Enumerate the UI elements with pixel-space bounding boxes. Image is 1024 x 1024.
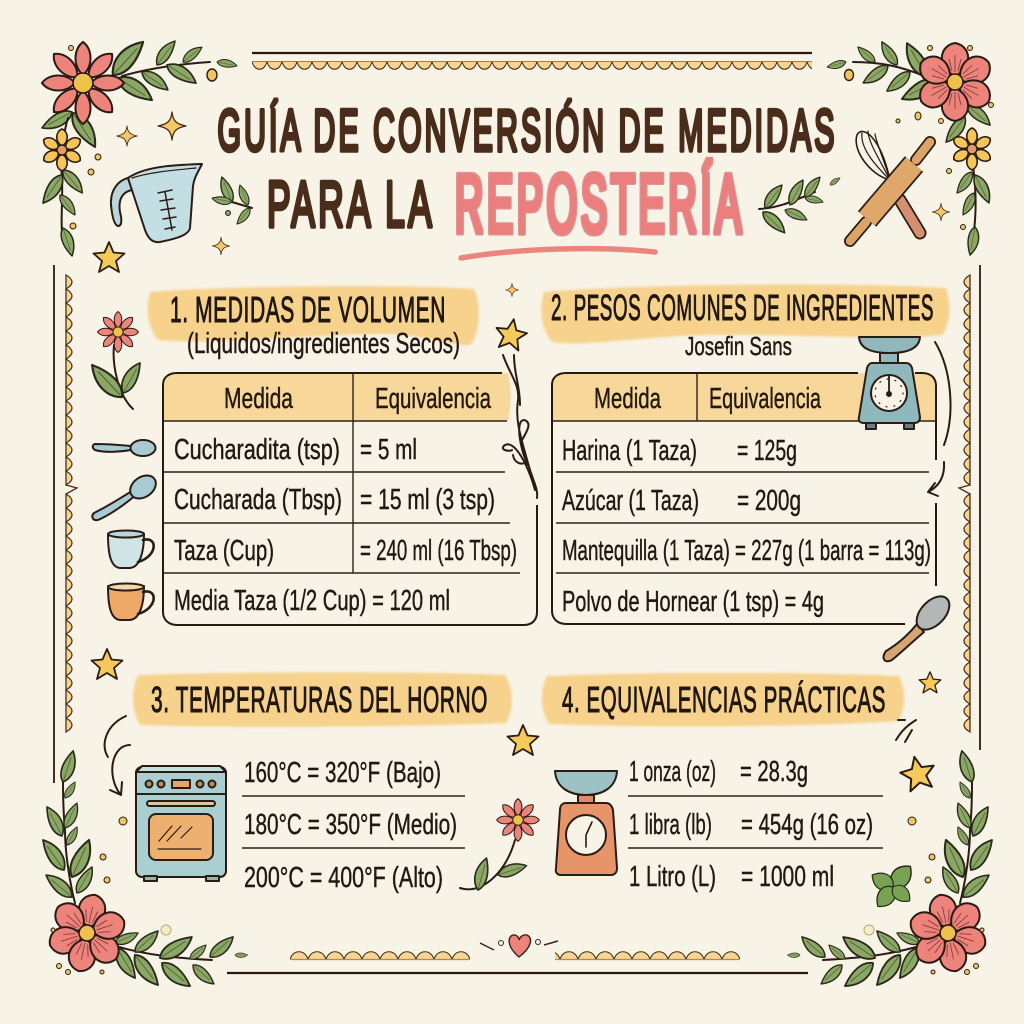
icon: heart ornament: [480, 935, 558, 957]
icon: mint leaves: [868, 860, 917, 912]
icon: oven: [136, 766, 226, 881]
table 1: = 5 ml: [360, 434, 417, 466]
left ornament border: [54, 265, 77, 783]
arrows to oven: [105, 716, 130, 795]
equivalences list: 1 libra (lb): [629, 809, 712, 841]
title underline: [461, 249, 655, 258]
table 2: Polvo de Hornear (1 tsp) = 4g: [562, 586, 824, 618]
table 1: Cucharadita (tsp): [174, 434, 340, 466]
corner floral: top right: [826, 39, 995, 256]
heading: section 3: 3. TEMPERATURAS DEL HORNO: [151, 679, 488, 720]
equivalences list: 1 Litro (L): [629, 861, 716, 893]
icon: orange cup: [108, 584, 154, 620]
icon: left twig: [211, 175, 253, 227]
heading: section 1: (Liquidos/ingredientes Secos): [187, 328, 460, 360]
heading: section 3: [133, 672, 512, 727]
icon: sparkles and stars top left: [94, 112, 230, 272]
icon: orange kitchen scale: [555, 771, 617, 875]
table 1: = 15 ml (3 tsp): [360, 484, 495, 516]
heading: section 4: [542, 673, 904, 726]
table 2: [552, 373, 936, 624]
table 1: [163, 373, 537, 625]
icon: right twig: [759, 174, 841, 236]
icon: teaspoon: [93, 440, 156, 456]
table 1: = 240 ml (16 Tbsp): [360, 535, 517, 567]
title: [218, 98, 838, 250]
icon: whisk and rolling pin: [850, 131, 930, 241]
table 1: Medida: [224, 383, 294, 415]
icon: flower with stem: [460, 799, 539, 891]
title: PARA LA: [267, 168, 435, 240]
table 2: Harina (1 Taza): [562, 435, 697, 467]
equivalences list: = 454g (16 oz): [741, 809, 873, 841]
icon: sparkle right: [932, 203, 950, 221]
icon: blue cup: [108, 530, 154, 568]
top ornament border: [252, 53, 812, 70]
panel: pesos: [542, 285, 949, 624]
corner floral: top left: [38, 36, 238, 257]
table 1: Taza (Cup): [174, 535, 274, 567]
equivalences list: = 1000 ml: [741, 861, 834, 893]
icon: blue kitchen scale: [859, 337, 920, 429]
equivalences list: 1 onza (oz): [629, 756, 716, 788]
table 2: Equivalencia: [709, 383, 822, 415]
heading: section 2: Josefin Sans: [685, 331, 792, 361]
icon: spoon: [884, 590, 956, 661]
table 2: Azúcar (1 Taza): [562, 485, 699, 517]
icon: small flower: [86, 312, 145, 409]
panel: volumen: [148, 286, 537, 625]
oven temperature list: 200°C = 400°F (Alto): [244, 862, 443, 894]
heading: section 1: [148, 286, 479, 360]
bottom ornament border: [227, 950, 808, 973]
icon: measuring cup: [111, 164, 202, 242]
table 1: Media Taza (1/2 Cup) = 120 ml: [174, 585, 450, 617]
table 2: Medida: [594, 383, 662, 415]
equivalences list: [628, 756, 883, 893]
icon: star and swirl between tables: [493, 283, 537, 498]
corner floral: bottom left: [38, 749, 248, 992]
right ornament border: [959, 265, 980, 750]
panel: equivalencias: [542, 673, 904, 893]
corner floral: bottom right: [787, 749, 997, 992]
table 2: = 125g: [737, 435, 797, 467]
icon: stars around oven heading: [92, 649, 538, 755]
oven temperature list: [242, 757, 465, 894]
equivalences list: = 28.3g: [740, 756, 808, 788]
table 1: Equivalencia: [375, 383, 492, 415]
icon: stars and swash right: [896, 672, 941, 793]
icon: tablespoon: [92, 471, 160, 520]
oven temperature list: 180°C = 350°F (Medio): [244, 809, 457, 841]
panel: temperaturas: [105, 672, 512, 894]
table 1: Cucharada (Tbsp): [174, 484, 342, 516]
oven temperature list: 160°C = 320°F (Bajo): [244, 757, 441, 789]
table 2: = 200g: [737, 485, 801, 517]
arrow: scale to table: [928, 342, 950, 496]
heading: section 2: [542, 285, 949, 361]
heading: section 1: 1. MEDIDAS DE VOLUMEN: [170, 289, 446, 330]
